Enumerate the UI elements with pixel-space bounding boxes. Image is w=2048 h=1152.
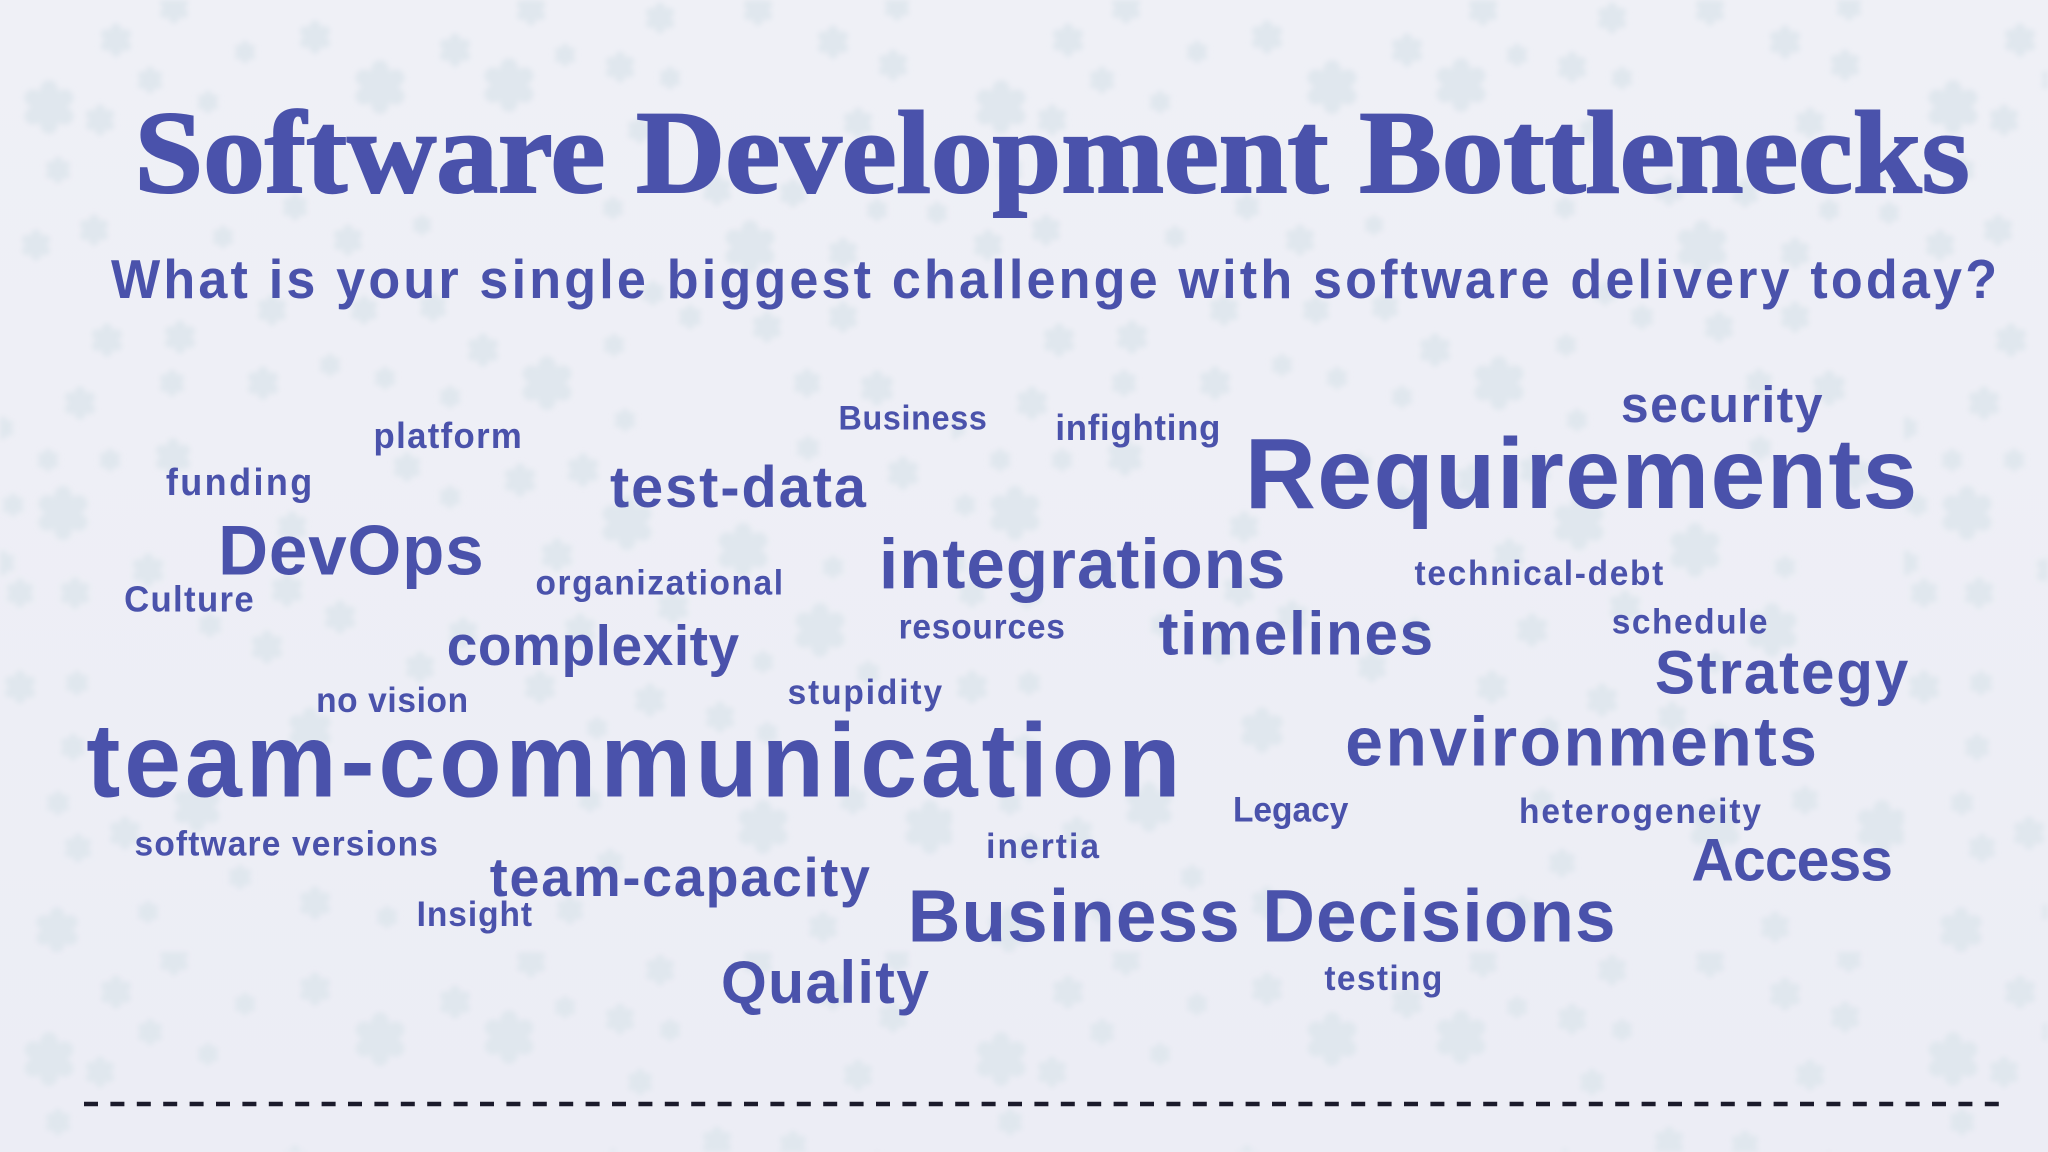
word: Access: Access — [1691, 826, 1893, 893]
word: Strategy: Strategy — [1655, 638, 1908, 707]
word: timelines: timelines — [1159, 599, 1433, 667]
word: inertia: inertia — [986, 827, 1100, 866]
word: stupidity: stupidity — [788, 673, 942, 712]
word: Quality: Quality — [721, 949, 929, 1016]
word: environments: environments — [1345, 703, 1817, 781]
word: platform: platform — [374, 415, 522, 456]
word: schedule: schedule — [1612, 603, 1767, 642]
title: Software Development Bottlenecks — [135, 88, 1970, 218]
word: team-capacity: team-capacity — [490, 847, 870, 908]
word: Business: Business — [839, 400, 987, 438]
word: DevOps: DevOps — [218, 511, 484, 590]
word: no vision: no vision — [316, 681, 468, 720]
word: Requirements: Requirements — [1245, 418, 1917, 530]
word: complexity: complexity — [447, 614, 739, 677]
word: organizational: organizational — [536, 564, 783, 602]
word: integrations: integrations — [879, 524, 1285, 603]
word: Legacy: Legacy — [1233, 791, 1348, 830]
word: security: security — [1621, 375, 1822, 433]
word: test-data: test-data — [610, 454, 867, 520]
word: technical-debt: technical-debt — [1415, 554, 1664, 593]
word: Business Decisions: Business Decisions — [908, 874, 1616, 958]
subtitle question: What is your single biggest challenge with software delivery today? — [111, 250, 1997, 310]
word: software versions: software versions — [135, 825, 438, 864]
word: Insight: Insight — [417, 895, 533, 934]
word: team-communication: team-communication — [86, 702, 1181, 819]
word: testing: testing — [1324, 959, 1442, 998]
word: funding: funding — [166, 461, 312, 503]
word: resources: resources — [899, 608, 1065, 647]
word: infighting: infighting — [1055, 407, 1220, 448]
word cloud — [86, 375, 1917, 1016]
word: heterogeneity: heterogeneity — [1519, 792, 1761, 831]
word: Culture: Culture — [124, 578, 254, 619]
